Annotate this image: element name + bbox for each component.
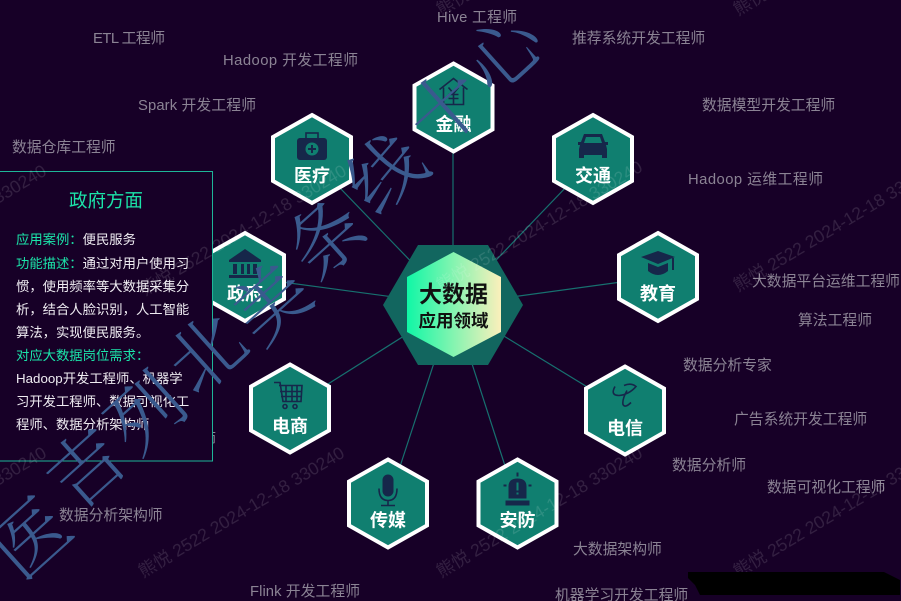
job labels cloud: 数据仓库工程师 bbox=[12, 139, 116, 156]
job labels cloud: 算法工程师 bbox=[798, 312, 872, 329]
node: 医疗: 医疗 bbox=[294, 165, 330, 186]
node: 交通: 交通 bbox=[575, 165, 611, 186]
connector lines bbox=[245, 107, 658, 503]
panel body text: Hadoop开发工程师、机器学 bbox=[16, 371, 183, 386]
panel heading: 政府方面 bbox=[69, 190, 143, 211]
small watermarks: 熊悦 2522 2024-12-18 330240 bbox=[433, 156, 646, 295]
node: 传媒: 传媒 bbox=[370, 510, 406, 530]
panel body text: 对应大数据岗位需求： bbox=[16, 348, 149, 363]
small watermarks: 熊悦 2522 2024-12-18 330240 bbox=[135, 442, 348, 581]
job labels cloud: 数据分析师 bbox=[672, 457, 746, 474]
node: 金融: 金融 bbox=[436, 114, 472, 134]
job labels cloud: 数据分析师 bbox=[142, 431, 216, 448]
central hub: 大数据 bbox=[419, 281, 488, 307]
job labels cloud: 大数据架构师 bbox=[573, 541, 662, 558]
node: 电商 bbox=[251, 364, 329, 452]
node: 电信: 电信 bbox=[607, 418, 643, 438]
large calligraphic watermark: 美 bbox=[204, 235, 331, 364]
panel body text: 算法，实现便民服务。 bbox=[16, 325, 149, 340]
panel body text: 析，结合人脸识别，人工智能 bbox=[16, 302, 189, 317]
large calligraphic watermark: 线 bbox=[319, 105, 446, 234]
panel body text bbox=[16, 232, 189, 432]
node: 电商: 电商 bbox=[272, 416, 308, 436]
panel body text: 程师、数据分析架构师 bbox=[16, 417, 149, 432]
panel body text: 功能描述：通过对用户使用习 bbox=[16, 255, 189, 271]
job labels cloud: 数据分析专家 bbox=[683, 357, 772, 374]
panel body text: 习开发工程师、数据可视化工 bbox=[16, 394, 189, 409]
job labels cloud: 推荐系统开发工程师 bbox=[572, 30, 705, 47]
node: 教育: 教育 bbox=[640, 283, 676, 304]
large calligraphic watermark: 吉 bbox=[19, 400, 146, 529]
node: 政府: 政府 bbox=[227, 283, 263, 304]
job labels cloud: Hadoop 开发工程师 bbox=[223, 52, 358, 69]
large calligraphic watermark bbox=[0, 0, 565, 599]
panel body text: 应用案例：便民服务 bbox=[16, 232, 136, 247]
large calligraphic watermark: 十 bbox=[379, 40, 506, 169]
job labels cloud: Flink 开发工程师 bbox=[250, 583, 360, 600]
node: 传媒 bbox=[349, 460, 427, 548]
job labels cloud: ETL 工程师 bbox=[93, 30, 165, 47]
node: 医疗 bbox=[273, 115, 351, 203]
job labels cloud: 数据分析架构师 bbox=[59, 507, 163, 524]
central hub: 应用领域 bbox=[418, 311, 489, 331]
job labels cloud: Spark 开发工程师 bbox=[138, 97, 256, 114]
job labels cloud: Hive 工程师 bbox=[437, 9, 517, 26]
small watermarks: 熊悦 2522 2024-12-18 330240 bbox=[433, 442, 646, 581]
job labels cloud: 广告系统开发工程师 bbox=[734, 411, 867, 428]
node: 教育 bbox=[619, 233, 697, 321]
redaction scribble bbox=[688, 572, 900, 595]
node: 政府 bbox=[206, 233, 284, 321]
node: 交通 bbox=[554, 115, 632, 203]
large calligraphic watermark: 列 bbox=[79, 345, 206, 474]
job labels cloud: 大数据平台运维工程师 bbox=[752, 273, 900, 290]
large calligraphic watermark: 北 bbox=[139, 285, 266, 414]
large calligraphic watermark: 条 bbox=[259, 170, 386, 299]
job labels cloud: Hadoop 运维工程师 bbox=[688, 171, 823, 188]
node: 电信 bbox=[586, 366, 664, 454]
small watermarks: 熊悦 2522 2024-12-18 330240 bbox=[137, 160, 350, 299]
node: 安防: 安防 bbox=[500, 510, 536, 530]
node: 安防 bbox=[478, 460, 556, 548]
central hub bbox=[383, 245, 523, 365]
job labels cloud: 数据模型开发工程师 bbox=[702, 97, 835, 114]
job labels cloud: 数据可视化工程师 bbox=[767, 479, 886, 496]
panel body text: 惯，使用频率等大数据采集分 bbox=[16, 278, 189, 294]
panel: 政府方面 bbox=[0, 172, 212, 461]
node: 金融 bbox=[414, 64, 492, 152]
